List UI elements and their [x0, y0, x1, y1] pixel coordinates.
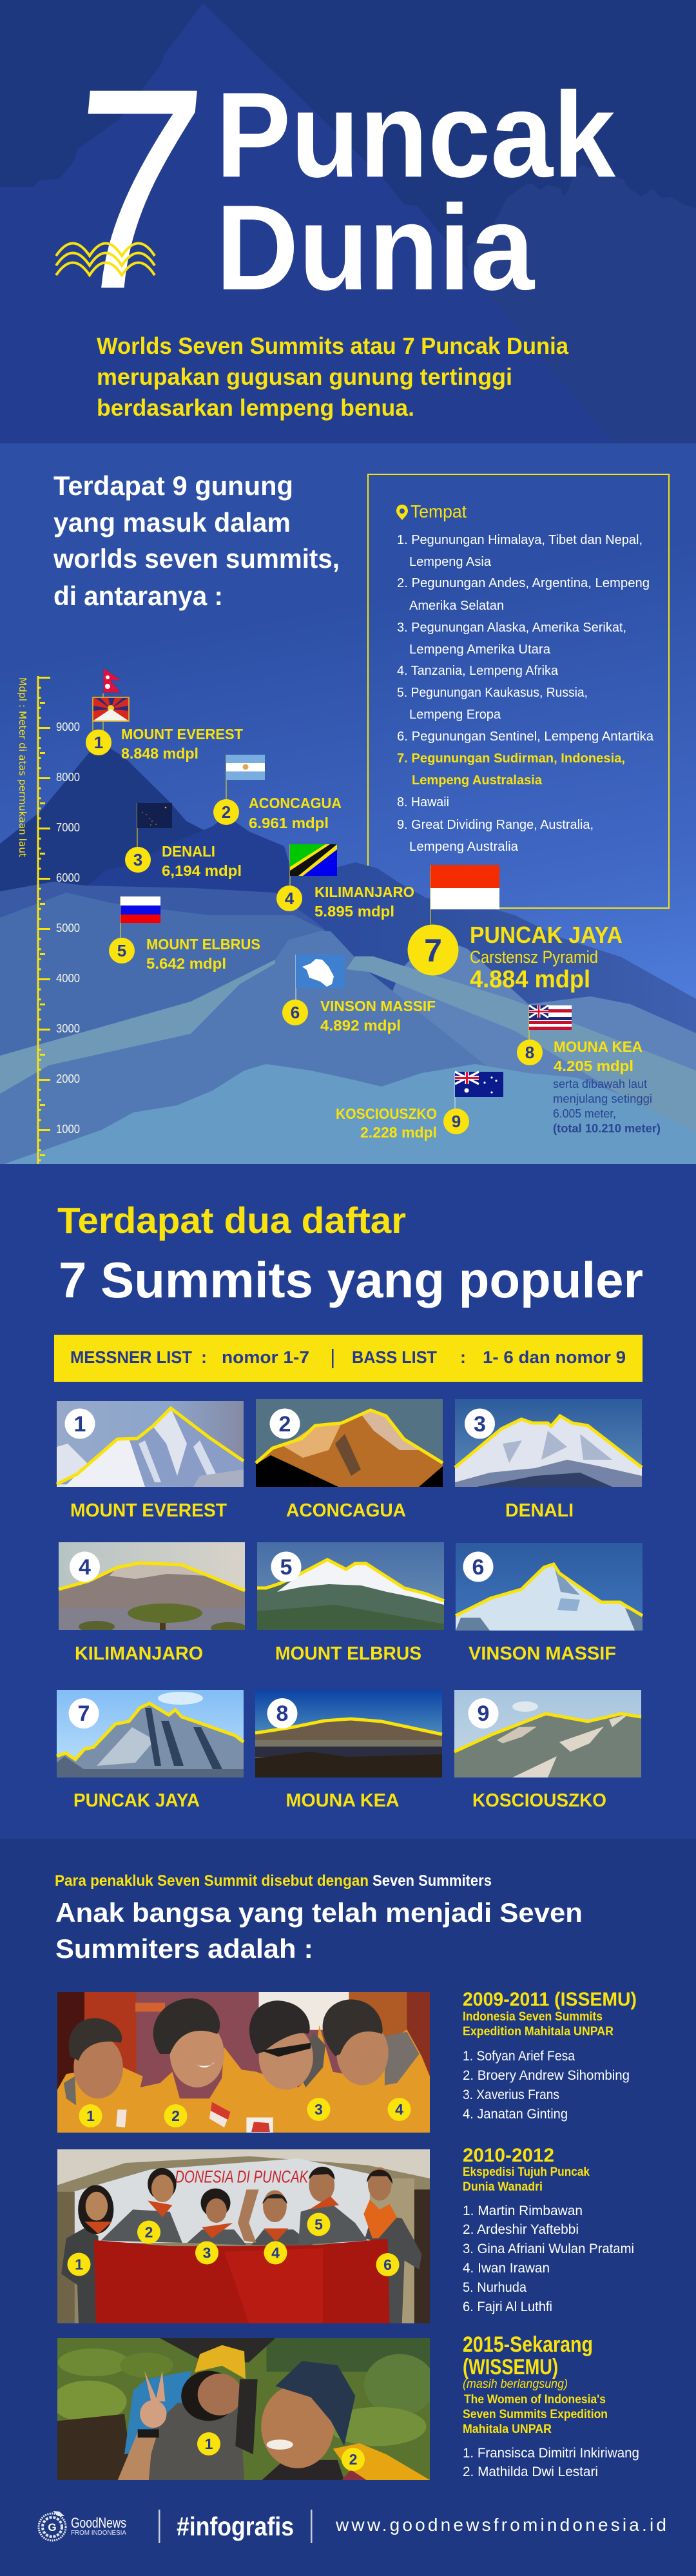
- number badges: 2: [349, 2451, 357, 2468]
- elevation scale: 6000: [56, 871, 80, 884]
- marker: mouna kea: [517, 1005, 661, 1135]
- team text: wanadri: 2. Ardeshir Yaftebbi: [463, 2222, 579, 2237]
- location list: [396, 501, 654, 854]
- number badges: 1: [86, 2107, 95, 2124]
- caption: KOSCIOUSZKO: [472, 1790, 606, 1811]
- team text: wissemu: (WISSEMU): [463, 2355, 558, 2379]
- marker: puncak jaya: [407, 865, 623, 993]
- banner: messner and bass list: 1- 6 dan nomor 9: [483, 1348, 626, 1367]
- number badge: [271, 1552, 302, 1582]
- caption: DENALI: [505, 1500, 574, 1521]
- card: puncak jaya: 7: [78, 1701, 90, 1726]
- team text: issemu: 1. Sofyan Arief Fesa: [463, 2049, 575, 2064]
- number badge 5: [109, 938, 135, 964]
- number badges: 3: [314, 2101, 323, 2118]
- label: aconcagua: 6.961 mdpl: [249, 815, 329, 831]
- team text: issemu: 2009-2011 (ISSEMU): [463, 1989, 637, 2010]
- card: mount elbrus: 5: [280, 1555, 292, 1580]
- marker: denali: 3: [133, 850, 142, 869]
- label: puncak jaya: [470, 922, 623, 993]
- team text: issemu: Expedition Mahitala UNPAR: [463, 2025, 614, 2039]
- marker: puncak jaya: 7: [424, 933, 442, 969]
- mountain layers: [0, 741, 696, 1164]
- card: mount elbrus: [257, 1542, 444, 1664]
- elevation scale: 4000: [56, 972, 80, 985]
- marker: kilimanjaro: [276, 844, 414, 920]
- flag: tibet: [93, 697, 129, 721]
- location items: Lempeng Australia: [409, 840, 519, 854]
- label: puncak jaya: 4.884 mdpl: [470, 966, 590, 993]
- note: mouna kea below sea: (total 10.210 meter): [553, 1122, 661, 1135]
- elevation scale: 8000: [56, 771, 80, 784]
- label: kosciouszko: KOSCIOUSZKO: [336, 1105, 437, 1122]
- logo: goodnews from indonesia: GoodNews: [71, 2515, 126, 2531]
- panel: hero: [0, 0, 696, 443]
- number badges: 1: [205, 2436, 213, 2452]
- number badges: 5: [314, 2216, 323, 2232]
- panel: seven summiters: [0, 1839, 696, 2576]
- label: kilimanjaro: [314, 884, 414, 920]
- number badges: 6: [383, 2256, 392, 2273]
- flag: indonesia: [430, 865, 499, 909]
- big number seven: 7: [55, 31, 213, 347]
- heading: two lists: 7 Summits yang populer: [59, 1252, 643, 1308]
- label: mount elbrus: MOUNT ELBRUS: [146, 936, 260, 953]
- number badge 4: [276, 886, 302, 911]
- team text: wanadri: 6. Fajri Al Luthfi: [463, 2300, 552, 2314]
- marker: kilimanjaro: 4: [285, 889, 295, 908]
- photo: wissemu team: [51, 2338, 435, 2480]
- location items: Lempeng Asia: [409, 555, 492, 569]
- location items: 3. Pegunungan Alaska, Amerika Serikat,: [397, 621, 626, 635]
- note: mouna kea below sea: menjulang setinggi: [553, 1092, 652, 1105]
- banner: messner and bass list: :: [460, 1348, 466, 1367]
- icon: map pin: [396, 505, 408, 520]
- heading: [55, 1897, 583, 1964]
- banner: messner and bass list: nomor 1-7: [222, 1348, 309, 1367]
- label: puncak jaya: Carstensz Pyramid: [470, 947, 598, 967]
- location items: Lempeng Australasia: [412, 773, 543, 788]
- location heading: Tempat: [411, 501, 467, 521]
- marker: kosciouszko: [336, 1072, 503, 1141]
- elevation scale: 7000: [56, 821, 80, 834]
- location items: 1. Pegunungan Himalaya, Tibet dan Nepal,: [397, 533, 643, 547]
- location items: Lempeng Amerika Utara: [409, 643, 551, 657]
- marker: mount everest: 1: [94, 733, 103, 752]
- logo: goodnews from indonesia: FROM INDONESIA: [71, 2530, 126, 2537]
- title: [216, 67, 615, 315]
- heading: Anak bangsa yang telah menjadi Seven: [55, 1897, 583, 1928]
- label: mouna kea: 4.205 mdpl: [554, 1058, 633, 1074]
- label: kosciouszko: [336, 1105, 437, 1141]
- label: kilimanjaro: KILIMANJARO: [314, 884, 414, 900]
- team text: issemu: 2. Broery Andrew Sihombing: [463, 2068, 630, 2083]
- number badge: [468, 1698, 499, 1729]
- elevation scale: 5000: [56, 922, 80, 935]
- elevation scale: 2000: [56, 1072, 80, 1085]
- label: vinson massif: [320, 998, 436, 1034]
- label: denali: 6,194 mdpl: [162, 862, 242, 879]
- card: kilimanjaro: 4: [79, 1555, 91, 1580]
- intro text: berdasarkan lempeng benua.: [97, 394, 414, 421]
- card: kosciouszko: 9: [478, 1701, 489, 1726]
- people: [61, 2227, 99, 2323]
- team text: wanadri: Ekspedisi Tujuh Puncak: [463, 2165, 590, 2179]
- card: aconcagua: 2: [279, 1412, 291, 1437]
- number badge 1: [86, 730, 111, 755]
- icon: yellow waves: [56, 244, 155, 275]
- card: denali: 3: [474, 1412, 486, 1437]
- title: Puncak: [216, 67, 615, 202]
- note: mouna kea below sea: [553, 1078, 661, 1135]
- team text: wanadri: 5. Nurhuda: [463, 2280, 527, 2295]
- team text: wanadri: 3. Gina Afriani Wulan Pratami: [463, 2242, 634, 2256]
- note: mouna kea below sea: serta dibawah laut: [553, 1078, 647, 1090]
- card: vinson massif: 6: [472, 1555, 484, 1580]
- marker: vinson massif: 6: [291, 1003, 300, 1022]
- caption: KILIMANJARO: [75, 1643, 203, 1664]
- hair: [69, 2018, 122, 2060]
- flag: antarctica: [296, 954, 345, 988]
- card: vinson massif: [456, 1543, 643, 1664]
- number badges: 4: [395, 2101, 403, 2118]
- photo: wanadri team: DONESIA DI PUNCAK: [175, 2167, 309, 2187]
- intro text: merupakan gugusan gunung tertinggi: [97, 363, 512, 390]
- heading: nine mountains: di antaranya :: [53, 581, 223, 611]
- flag: argentina: [226, 755, 265, 780]
- caption: MOUNT ELBRUS: [275, 1643, 421, 1664]
- number badge: [70, 1552, 100, 1582]
- logo: goodnews from indonesia: [39, 2511, 126, 2541]
- label: mount elbrus: 5.642 mdpl: [146, 955, 226, 972]
- number badges: [79, 2098, 411, 2127]
- label: denali: DENALI: [162, 843, 215, 860]
- elevation scale: 9000: [56, 721, 80, 733]
- flag: alaska: [137, 803, 172, 828]
- caption: VINSON MASSIF: [469, 1643, 616, 1664]
- flag: tanzania: [290, 844, 337, 876]
- team text: wanadri: 2010-2012: [463, 2145, 554, 2166]
- marker: mouna kea: 8: [525, 1043, 534, 1062]
- banner: messner and bass list: MESSNER LIST: [70, 1348, 192, 1367]
- heading: two lists: Terdapat dua daftar: [57, 1200, 406, 1241]
- number badge: [269, 1409, 300, 1438]
- location items: 5. Pegunungan Kaukasus, Russia,: [397, 686, 588, 700]
- number badges: [67, 2213, 400, 2276]
- flag: australia: [455, 1072, 503, 1097]
- team text: wissemu: Mahitala UNPAR: [463, 2423, 552, 2436]
- note: mouna kea below sea: 6.005 meter,: [553, 1107, 616, 1120]
- subheading: Para penakluk Seven Summit disebut dengan: [55, 1872, 369, 1890]
- caption: PUNCAK JAYA: [73, 1790, 200, 1811]
- number badges: 3: [203, 2244, 211, 2261]
- caption: ACONCAGUA: [286, 1500, 406, 1521]
- marker: mount elbrus: [109, 896, 260, 972]
- card: puncak jaya: [57, 1690, 244, 1811]
- number badges: 4: [271, 2244, 280, 2261]
- label: kilimanjaro: 5.895 mdpl: [314, 903, 394, 920]
- heading: nine mountains: worlds seven summits,: [53, 543, 340, 574]
- number badge: [463, 1552, 494, 1582]
- number badge 8: [517, 1040, 543, 1065]
- panel: mountain height chart: [0, 443, 696, 1164]
- card: mouna kea: [255, 1690, 442, 1811]
- marker: denali: [125, 803, 242, 879]
- card: aconcagua: [256, 1399, 443, 1521]
- caption: MOUNT EVEREST: [70, 1500, 227, 1521]
- flag: hawaii: [529, 1005, 572, 1030]
- photo: issemu team: [57, 1992, 430, 2133]
- marker: mount elbrus: 5: [117, 941, 126, 960]
- hashtag: #infografis: [177, 2512, 294, 2541]
- label: kosciouszko: 2.228 mdpl: [360, 1124, 437, 1141]
- panel: popular lists: [0, 1164, 696, 1839]
- label: denali: [162, 843, 242, 879]
- location items: Amerika Selatan: [409, 599, 504, 613]
- label: mount everest: MOUNT EVEREST: [121, 726, 243, 742]
- heading: nine mountains: Terdapat 9 gunung: [53, 470, 293, 501]
- logo: goodnews from indonesia: G: [48, 2521, 57, 2533]
- team text: wissemu: The Women of Indonesia's: [464, 2393, 606, 2407]
- team text: issemu: [463, 1989, 637, 2122]
- label: aconcagua: ACONCAGUA: [249, 795, 342, 811]
- number badges: 2: [145, 2223, 153, 2240]
- marker: vinson massif: [282, 954, 436, 1034]
- caption: MOUNA KEA: [286, 1790, 400, 1811]
- card: kilimanjaro: [59, 1542, 247, 1664]
- card: denali: [455, 1399, 642, 1521]
- location items: 4. Tanzania, Lempeng Afrika: [397, 664, 559, 678]
- team text: issemu: 3. Xaverius Frans: [463, 2087, 559, 2102]
- number badge 6: [282, 1000, 308, 1025]
- label: mount everest: 8.848 mdpl: [121, 745, 198, 762]
- banner: messner and bass list: :: [201, 1348, 207, 1367]
- banner: messner and bass list: [54, 1335, 643, 1382]
- intro text: [97, 333, 569, 421]
- number badge: [64, 1409, 95, 1438]
- location items: 8. Hawaii: [397, 795, 449, 809]
- team text: issemu: Indonesia Seven Summits: [463, 2010, 603, 2024]
- card: kosciouszko: [454, 1690, 641, 1811]
- location items: 2. Pegunungan Andes, Argentina, Lempeng: [397, 576, 650, 590]
- subheading: Seven Summiters: [372, 1872, 492, 1890]
- card: mouna kea: 8: [276, 1701, 288, 1726]
- team text: wanadri: [463, 2145, 634, 2314]
- location items: 6. Pegunungan Sentinel, Lempeng Antartika: [397, 730, 654, 744]
- team text: wissemu: 1. Fransisca Dimitri Inkiriwang: [463, 2446, 639, 2461]
- heading: Summiters adalah :: [55, 1933, 313, 1964]
- label: puncak jaya: PUNCAK JAYA: [470, 922, 623, 948]
- jackets: [57, 2025, 430, 2133]
- team text: issemu: 4. Janatan Ginting: [463, 2107, 568, 2122]
- red flag: [94, 2239, 390, 2323]
- elevation scale: 3000: [56, 1022, 80, 1035]
- website: www.goodnewsfromindonesia.id: [335, 2515, 666, 2535]
- number badge 7: [407, 924, 459, 976]
- location items: Lempeng Eropa: [409, 708, 501, 722]
- location items: 7. Pegunungan Sudirman, Indonesia,: [397, 751, 625, 766]
- team text: wanadri: Dunia Wanadri: [463, 2180, 543, 2194]
- elevation scale: 1000: [56, 1123, 80, 1136]
- number badge: [267, 1698, 298, 1729]
- label: mount elbrus: [146, 936, 260, 972]
- team text: wissemu: [463, 2332, 639, 2479]
- label: mouna kea: [554, 1038, 643, 1074]
- marker: aconcagua: 2: [222, 802, 231, 822]
- marker: mount everest: [86, 668, 243, 762]
- number badges: 2: [171, 2107, 180, 2124]
- label: vinson massif: 4.892 mdpl: [320, 1017, 401, 1034]
- number badges: [197, 2432, 365, 2471]
- label: mount everest: [121, 726, 243, 762]
- team text: wanadri: 1. Martin Rimbawan: [463, 2203, 583, 2218]
- location items: 9. Great Dividing Range, Australia,: [397, 818, 594, 832]
- number badge: [68, 1698, 99, 1729]
- team text: wissemu: (masih berlangsung): [463, 2377, 568, 2391]
- footer: [39, 2510, 666, 2543]
- location box outline: [368, 474, 669, 908]
- label: aconcagua: [249, 795, 342, 831]
- number badge 3: [125, 847, 151, 873]
- intro text: Worlds Seven Summits atau 7 Puncak Dunia: [97, 333, 569, 359]
- location items: [397, 533, 654, 854]
- marker: kosciouszko: 9: [452, 1112, 461, 1131]
- team text: wissemu: 2015-Sekarang: [463, 2332, 593, 2357]
- heading: nine mountains: [53, 470, 340, 611]
- details: [196, 2062, 215, 2068]
- title: Dunia: [216, 180, 535, 315]
- number badges: 1: [75, 2256, 83, 2272]
- number badge 2: [213, 799, 239, 825]
- flag: nepal: [103, 668, 122, 693]
- label: vinson massif: VINSON MASSIF: [320, 998, 436, 1014]
- number badge 9: [443, 1109, 469, 1134]
- elevation scale: Mdpl : Meter di atas permukaan laut: [17, 677, 28, 857]
- marker: aconcagua: [213, 755, 342, 831]
- photo: wanadri team: [57, 2149, 430, 2323]
- heading: nine mountains: yang masuk dalam: [53, 507, 291, 537]
- number badge: [465, 1409, 495, 1438]
- team text: wissemu: Seven Summits Expedition: [463, 2408, 608, 2421]
- team text: wissemu: 2. Mathilda Dwi Lestari: [463, 2465, 598, 2479]
- card: mount everest: 1: [74, 1412, 86, 1437]
- faces: [73, 2036, 123, 2098]
- elevation scale: [17, 676, 80, 1164]
- flag: russia: [121, 896, 160, 923]
- card: mount everest: [57, 1401, 244, 1521]
- banner: messner and bass list: BASS LIST: [352, 1348, 437, 1367]
- heading: two lists: [57, 1200, 643, 1308]
- label: mouna kea: MOUNA KEA: [554, 1038, 643, 1055]
- team text: wanadri: 4. Iwan Irawan: [463, 2261, 550, 2276]
